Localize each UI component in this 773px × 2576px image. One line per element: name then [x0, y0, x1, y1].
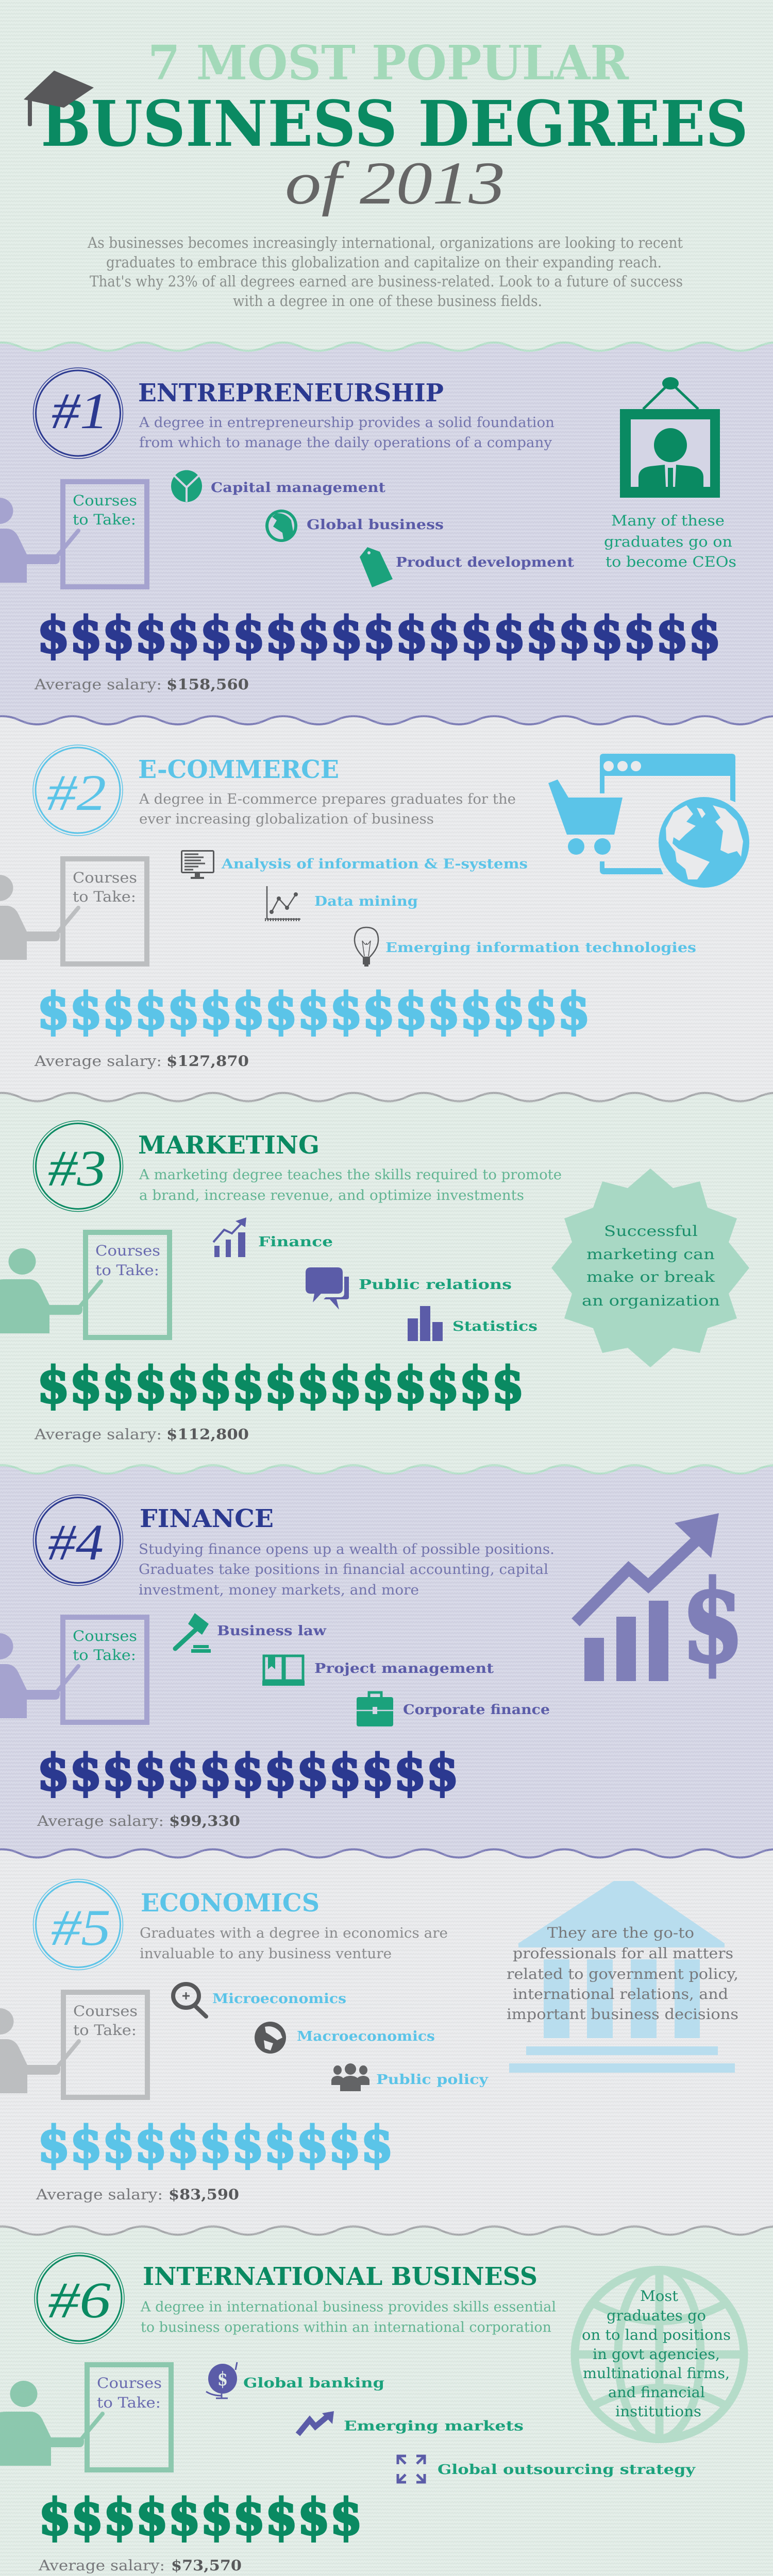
intro paragraph: graduates to embrace this globalization and capitalize on their expanding reach.: [106, 253, 662, 271]
description: invaluable to any business venture: [140, 1946, 392, 1962]
teacher and board: to Take:: [73, 511, 136, 528]
callout: graduates go on: [604, 533, 732, 550]
heading: ECONOMICS: [141, 1889, 320, 1918]
description: Graduates with a degree in economics are: [140, 1925, 448, 1941]
course: data mining: Data mining: [314, 894, 418, 909]
description: from which to manage the daily operations of a company: [139, 435, 552, 451]
heading: INTERNATIONAL BUSINESS: [143, 2262, 537, 2291]
callout: wire globe: institutions: [615, 2403, 701, 2420]
callout: to become CEOs: [606, 553, 736, 570]
average salary: Average salary:: [38, 2557, 165, 2574]
teacher and board: Courses: [73, 2003, 138, 2020]
rank badge #3: #3: [48, 1140, 106, 1197]
teacher and board: [0, 482, 147, 587]
description: Graduates take positions in financial accounting, capital: [139, 1562, 548, 1578]
average salary: $73,570: [171, 2557, 242, 2574]
teacher and board: Courses: [95, 1242, 160, 1259]
description: a brand, increase revenue, and optimize investments: [139, 1188, 524, 1204]
course: global banking: [206, 2362, 384, 2398]
average salary: Average salary:: [34, 1426, 162, 1443]
average salary: Average salary:: [34, 676, 162, 693]
salary dollar bar: $$$$$$$$$$: [39, 2488, 362, 2546]
rank badge #6: #6: [48, 2272, 111, 2329]
description: A degree in entrepreneurship provides a solid foundation: [139, 415, 554, 431]
course: global business: [265, 510, 444, 542]
course: statistics: [408, 1306, 537, 1341]
callout: wire globe: Most: [640, 2287, 679, 2304]
salary dollar bar: $$$$$$$$$$$$$$$: [37, 1356, 524, 1414]
course: microeconomics: [173, 1984, 346, 2016]
section background: entrepreneurship: [0, 343, 773, 728]
teacher and board: Courses: [73, 869, 137, 886]
callout: starburst: [551, 1168, 749, 1367]
course: emerging markets: [298, 2411, 524, 2434]
description: [140, 1925, 448, 1962]
intro paragraph: As businesses becomes increasingly international, organizations are looking to recent: [87, 234, 683, 251]
average salary: [34, 1426, 249, 1443]
teacher and board: [0, 1992, 147, 2097]
course: product development: Product development: [396, 555, 574, 570]
course: business law: Business law: [217, 1623, 327, 1639]
icon: browser cart globe: [548, 754, 749, 888]
course: public policy: Public policy: [376, 2072, 489, 2088]
icon: framed portrait: [620, 377, 720, 498]
teacher and board: to Take:: [73, 888, 136, 905]
salary dollar bar: $$$$$$$$$$$$$: [37, 1743, 459, 1802]
course: microeconomics: Microeconomics: [212, 1991, 346, 2007]
course: finance: [213, 1217, 333, 1257]
description: A degree in international business provides skills essential: [140, 2299, 556, 2315]
callout: wire globe: [575, 2270, 744, 2439]
teacher and board: to Take:: [97, 2394, 161, 2411]
course: statistics: Statistics: [452, 1319, 537, 1334]
rank badge #4: [33, 1495, 123, 1586]
course: product development: [360, 547, 574, 587]
panel: #4 finance: [0, 1495, 744, 1829]
course: public relations: Public relations: [359, 1277, 512, 1293]
callout: wire globe: graduates go: [607, 2307, 706, 2324]
title block: [24, 35, 748, 217]
average salary: [37, 1812, 240, 1829]
teacher and board: Courses: [97, 2375, 162, 2392]
intro paragraph: [87, 234, 683, 310]
section background: marketing: [0, 1093, 773, 1477]
callout: wire globe: and financial: [608, 2384, 705, 2401]
heading: FINANCE: [140, 1504, 274, 1533]
rank badge #3: [33, 1121, 123, 1212]
callout: wire globe: multinational firms,: [583, 2365, 730, 2382]
teacher and board: [0, 859, 147, 964]
icon: rising chart and dollar: [576, 1513, 744, 1688]
average salary: [38, 2557, 242, 2574]
heading: ENTREPRENEURSHIP: [138, 379, 444, 408]
average salary: [36, 2186, 239, 2203]
description: A degree in E-commerce prepares graduates for the: [139, 791, 516, 807]
teacher and board: [0, 1617, 147, 1722]
course: global business: Global business: [307, 517, 444, 533]
teacher and board: to Take:: [73, 2022, 137, 2039]
course: public relations: [306, 1267, 512, 1310]
course: capital management: [171, 470, 385, 502]
description: ever increasing globalization of business: [139, 811, 434, 827]
callout: bank building: international relations, and: [513, 1986, 728, 2003]
teacher and board: [0, 1232, 170, 1337]
course: corporate finance: [357, 1692, 550, 1726]
title line: business degrees: BUSINESS DEGREES: [41, 87, 748, 161]
description: [139, 791, 516, 827]
average salary: $127,870: [166, 1053, 249, 1070]
average salary: Average salary:: [36, 2186, 163, 2203]
course: emerging information technologies: [355, 927, 696, 967]
section background: economics: [0, 1850, 773, 2238]
salary dollar bar: $$$$$$$$$$$$$$$$$: [37, 982, 590, 1040]
panel: #5 economics: [0, 1879, 738, 2203]
rank badge #2: #2: [47, 764, 106, 821]
callout: bank building: They are the go-to: [547, 1924, 694, 1941]
course: project management: Project management: [314, 1661, 494, 1676]
rank badge #4: #4: [48, 1514, 104, 1571]
course: macroeconomics: Macroeconomics: [297, 2029, 435, 2044]
callout: starburst: marketing can: [586, 1246, 715, 1263]
panel: #6 international business: [0, 2253, 744, 2574]
course: emerging markets: Emerging markets: [344, 2418, 524, 2434]
average salary: $83,590: [169, 2186, 239, 2203]
teacher and board: Courses: [73, 1628, 137, 1645]
callout: starburst: make or break: [586, 1268, 715, 1285]
average salary: [34, 1053, 249, 1070]
salary dollar bar: $$$$$$$$$$$$$$$$$$$$$: [37, 606, 721, 664]
callout: bank building: related to government policy,: [507, 1965, 738, 1982]
rank badge #6: [35, 2253, 124, 2344]
callout: bank building: professionals for all matters: [513, 1945, 733, 1962]
course: data mining: [265, 886, 418, 920]
rank badge #1: #1: [52, 382, 108, 439]
callout: bank building: important business decisions: [507, 2006, 738, 2023]
course: global outsourcing strategy: [398, 2456, 696, 2482]
title line: 7 most popular: 7 MOST POPULAR: [148, 35, 629, 91]
description: Studying finance opens up a wealth of possible positions.: [139, 1541, 554, 1557]
course: corporate finance: Corporate finance: [403, 1702, 550, 1718]
description: [139, 415, 554, 451]
course: public policy: [331, 2063, 489, 2091]
section background: international business: [0, 2227, 773, 2576]
average salary: [34, 676, 249, 693]
description: to business operations within an international corporation: [141, 2319, 551, 2335]
intro paragraph: That's why 23% of all degrees earned are business-related. Look to a future of success: [90, 273, 683, 290]
course: global outsourcing strategy: Global outsourcing strategy: [438, 2462, 696, 2478]
course: analysis of information: Analysis of information & E-systems: [221, 856, 528, 872]
callout: starburst: an organization: [582, 1292, 720, 1309]
description: A marketing degree teaches the skills required to promote: [139, 1167, 562, 1183]
average salary: $158,560: [166, 676, 249, 693]
icon: rising chart and dollar: $: [681, 1556, 744, 1688]
average salary: $99,330: [169, 1812, 240, 1829]
title line: of 2013: of 2013: [285, 149, 505, 217]
heading: MARKETING: [138, 1131, 320, 1160]
panel: #2 e-commerce: [0, 745, 749, 1070]
rank badge #1: [33, 368, 123, 459]
description: [139, 1541, 554, 1598]
course: capital management: Capital management: [211, 480, 385, 496]
section background: e-commerce: [0, 716, 773, 1105]
teacher and board: to Take:: [95, 1262, 159, 1279]
rank badge #5: [33, 1879, 123, 1970]
course: analysis of information: [181, 851, 528, 879]
course: business law: [175, 1613, 327, 1653]
intro paragraph: with a degree in one of these business fields.: [233, 292, 542, 310]
teacher and board: [0, 2365, 171, 2470]
callout: bank building: [507, 1881, 738, 2073]
icon: graduation cap: [24, 71, 94, 126]
heading: E-COMMERCE: [138, 755, 339, 784]
salary dollar bar: $$$$$$$$$$$: [38, 2115, 393, 2174]
teacher and board: Courses: [73, 492, 137, 509]
description: investment, money markets, and more: [139, 1582, 419, 1598]
panel: #3 marketing: [0, 1121, 749, 1443]
callout: wire globe: on to land positions: [582, 2327, 731, 2343]
course: global banking: Global banking: [243, 2376, 384, 2391]
course: macroeconomics: [255, 2022, 435, 2054]
rank badge #5: #5: [51, 1899, 111, 1956]
course: emerging information technologies: Emerging information technologies: [385, 940, 696, 956]
rank badge #2: [33, 745, 123, 836]
callout: Many of these: [611, 512, 725, 529]
description: [139, 1167, 562, 1204]
panel: #1 entrepreneurship: [0, 368, 736, 693]
course: finance: Finance: [258, 1234, 333, 1250]
callout: starburst: Successful: [604, 1223, 698, 1240]
course: project management: [262, 1656, 494, 1686]
callout: [604, 512, 736, 570]
callout: wire globe: in govt agencies,: [593, 2346, 720, 2363]
teacher and board: to Take:: [73, 1647, 136, 1664]
description: [140, 2299, 556, 2335]
average salary: Average salary:: [37, 1812, 164, 1829]
average salary: Average salary:: [34, 1053, 162, 1070]
section background: finance: [0, 1465, 773, 1861]
course: global banking: $: [217, 2368, 228, 2390]
average salary: $112,800: [166, 1426, 249, 1443]
